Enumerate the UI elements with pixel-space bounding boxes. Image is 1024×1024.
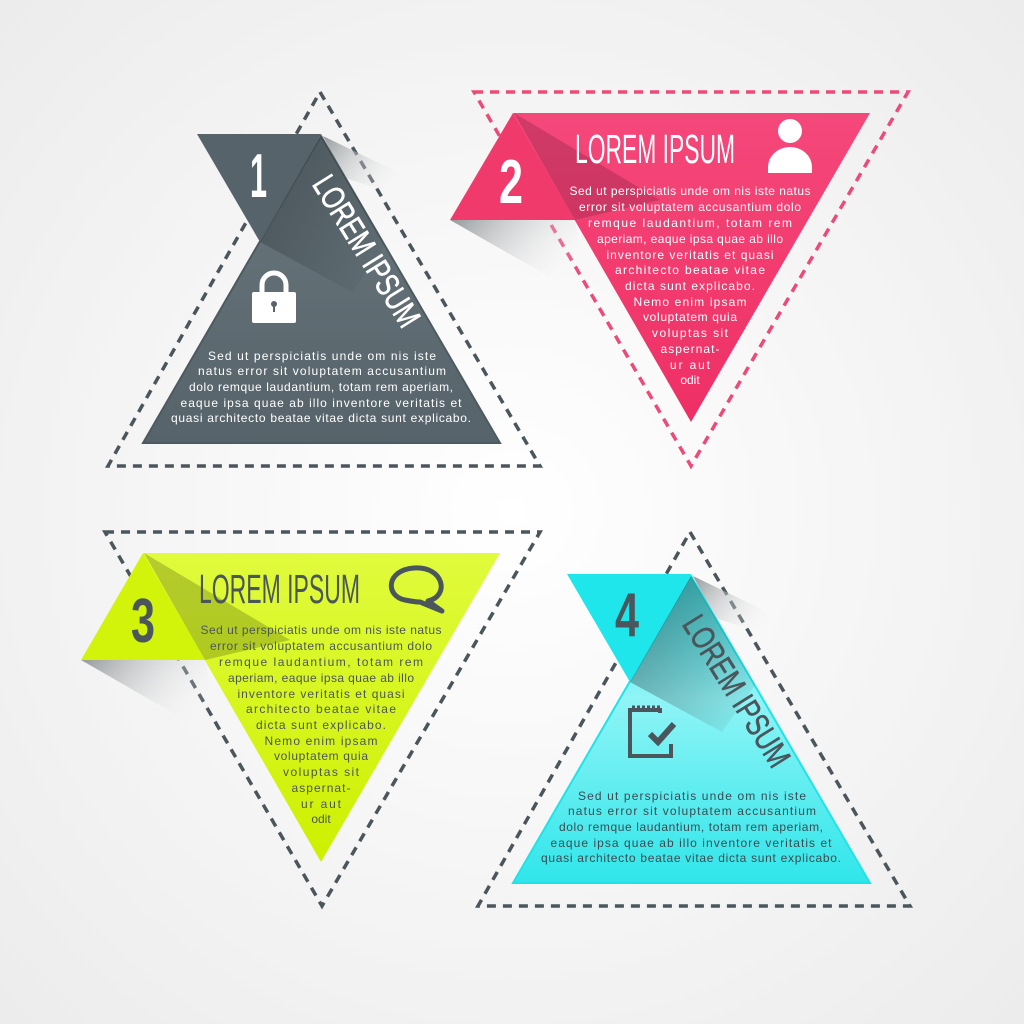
body text 2: Nemo enim ipsam [634, 295, 746, 309]
panel: step 4 [478, 532, 910, 906]
title 2: LOREM IPSUM [575, 126, 735, 172]
body text 1: Sed ut perspiciatis unde om nis iste [208, 349, 436, 363]
body text 2: aspernat- [660, 342, 720, 356]
body text 3: error sit voluptatem accusantium dolo [210, 639, 432, 653]
title 4: LOREM IPSUM [675, 608, 798, 774]
body text 4 [541, 789, 841, 865]
body text 4: eaque ipsa quae ab illo inventore veritatis et [550, 836, 832, 850]
number 3: 3 [131, 587, 155, 656]
title 3: LOREM IPSUM [199, 566, 360, 612]
body text 3: dicta sunt explicabo. [256, 718, 386, 732]
body text 2: odit [680, 373, 700, 387]
icon: speech bubble [391, 568, 442, 611]
body text 1: dolo remque laudantium, totam rem aperiam, [189, 380, 453, 394]
body text 3: remque laudantium, totam rem [219, 655, 423, 669]
body text 2: voluptatem quia [643, 310, 737, 324]
panel: step 1: 1 [250, 142, 267, 211]
body text 2 [570, 184, 810, 387]
body text 3: Nemo enim ipsam [264, 734, 378, 748]
icon: lock [252, 273, 296, 323]
title 1: LOREM IPSUM [305, 168, 428, 334]
body text 3: Sed ut perspiciatis unde om nis iste natus [200, 623, 442, 637]
number 2: 2 [499, 148, 523, 217]
body text 3: architecto beatae vitae [246, 702, 396, 716]
body text 2: ur aut [670, 358, 711, 372]
body text 2: error sit voluptatem accusantium dolo [579, 200, 801, 214]
body text 2: voluptas sit [652, 326, 729, 340]
body text 4: Sed ut perspiciatis unde om nis iste [578, 789, 806, 803]
body text 3: ur aut [301, 797, 342, 811]
body text 2: inventore veritatis et quasi [606, 248, 774, 262]
body text 2: remque laudantium, totam rem [588, 216, 792, 230]
number 4: 4 [615, 581, 639, 650]
body text 3: odit [311, 812, 331, 826]
body text 3 [200, 623, 442, 826]
body text 4: natus error sit voluptatem accusantium [568, 804, 816, 818]
body text 3: aperiam, eaque ipsa quae ab illo [228, 671, 414, 685]
body text 2: dicta sunt explicabo. [625, 279, 755, 293]
body text 4: dolo remque laudantium, totam rem aperiam, [559, 820, 823, 834]
body text 2: Sed ut perspiciatis unde om nis iste natus [570, 184, 810, 198]
body text 2: architecto beatae vitae [615, 263, 765, 277]
body text 3: voluptas sit [283, 765, 360, 779]
icon: user [768, 119, 812, 173]
panel: step 3 [81, 532, 540, 906]
body text 3: voluptatem quia [274, 749, 368, 763]
body text 2: aperiam, eaque ipsa quae ab illo [597, 232, 783, 246]
body text 4: quasi architecto beatae vitae dicta sunt explicabo. [541, 851, 841, 865]
icon: checklist [630, 708, 674, 756]
body text 1: natus error sit voluptatem accusantium [198, 364, 446, 378]
body text 3: inventore veritatis et quasi [238, 687, 404, 701]
body text 3: aspernat- [292, 781, 350, 795]
body text 1: quasi architecto beatae vitae dicta sunt explicabo. [171, 411, 471, 425]
panel: step 1 [108, 92, 540, 466]
body text 1 [171, 349, 471, 425]
panel: step 2 [450, 92, 908, 466]
body text 1: eaque ipsa quae ab illo inventore veritatis et [180, 396, 462, 410]
